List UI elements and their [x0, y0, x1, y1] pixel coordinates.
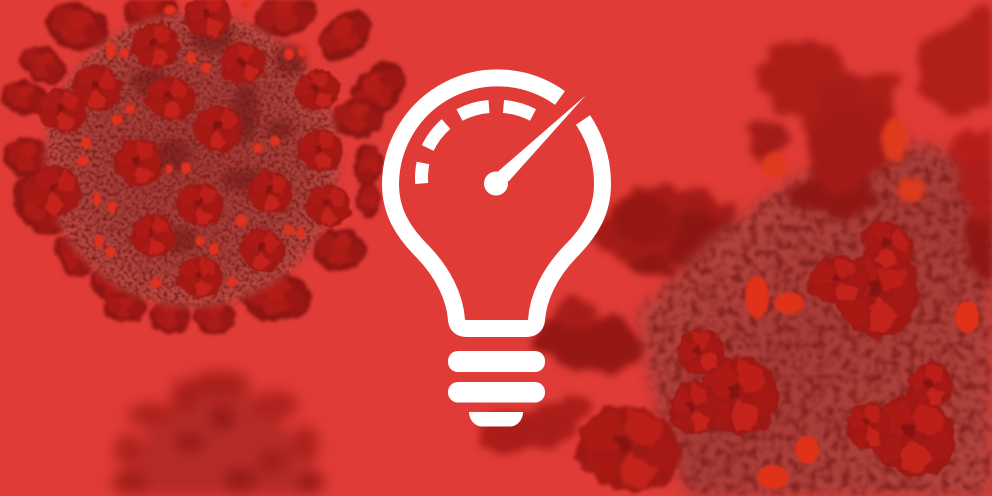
bulb base bars: [448, 351, 545, 426]
blurred virus bottom left: [112, 371, 324, 496]
blurred far spike clusters: [477, 7, 992, 452]
virus top left: [0, 0, 416, 335]
gauge hub: [484, 172, 508, 196]
orange blobs: [745, 276, 979, 489]
surface shadows: [132, 18, 306, 252]
virus body right: [640, 144, 992, 496]
bottom spike cluster: [571, 396, 690, 496]
virus body: [45, 13, 339, 307]
dial ticks: [422, 106, 533, 184]
inner spike clusters: [20, 0, 359, 302]
sharp spike clusters right: [670, 211, 970, 489]
outer spike clusters: [0, 0, 416, 335]
virus right: [477, 7, 992, 496]
orange dots: [77, 1, 306, 288]
gauge needle: [498, 96, 586, 182]
bulb outline: [390, 78, 602, 328]
icon: light bulb speedometer: [390, 78, 602, 426]
blurred spike clusters right: [626, 110, 992, 278]
